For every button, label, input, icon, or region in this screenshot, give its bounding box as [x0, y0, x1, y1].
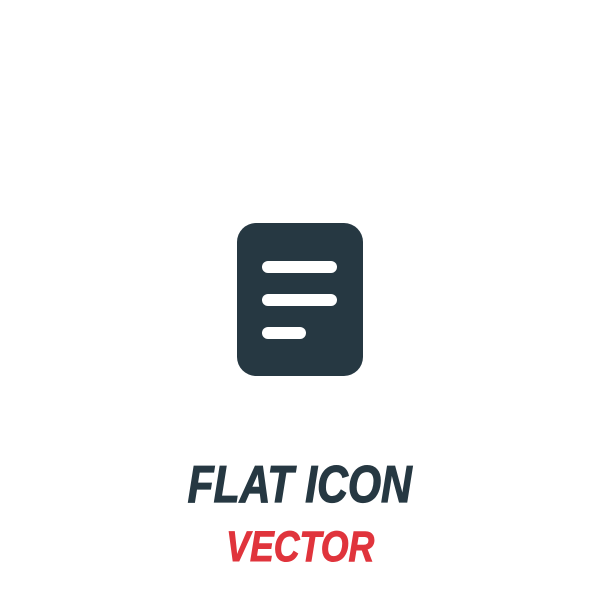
title: FLAT ICON: FLAT ICON	[188, 456, 412, 514]
subtitle: VECTOR: VECTOR	[226, 523, 374, 571]
